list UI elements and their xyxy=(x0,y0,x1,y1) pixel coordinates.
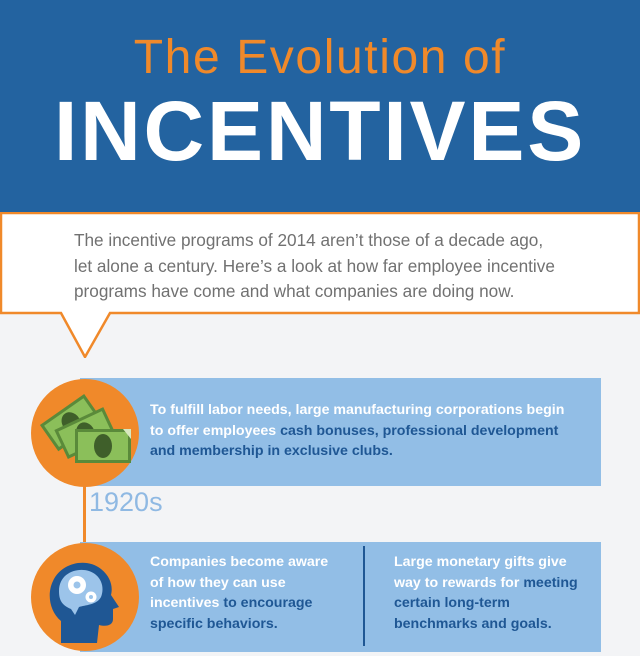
panel: labor needs xyxy=(80,378,601,486)
text: labor needs: To fulfill labor needs, large manufacturing corporations begin xyxy=(150,402,564,418)
text: labor needs: to offer employees cash bonuses, professional development xyxy=(150,422,558,438)
text: labor needs xyxy=(150,402,564,459)
text: right column: way to rewards for meeting xyxy=(394,574,578,590)
intro text: let alone a century. Here’s a look at how far employee incentive xyxy=(74,256,555,276)
title line 2: INCENTIVES xyxy=(54,84,586,178)
panel: 1920s xyxy=(80,542,601,652)
intro text: The incentive programs of 2014 aren’t those of a decade ago, xyxy=(74,230,543,250)
intro text: programs have come and what companies are doing now. xyxy=(74,281,514,301)
text: right column: certain long-term xyxy=(394,595,510,611)
year label: 1920s: 1920s xyxy=(89,487,163,517)
text: left column: incentives to encourage xyxy=(150,595,312,611)
timeline line xyxy=(83,480,86,550)
text: right column: benchmarks and goals. xyxy=(394,616,552,632)
icon: money circle xyxy=(31,379,139,487)
intro callout box xyxy=(0,212,640,358)
title line 1: The Evolution of xyxy=(134,31,506,84)
header banner xyxy=(0,0,640,212)
text: left column: of how they can use xyxy=(150,574,286,590)
text: right column: Large monetary gifts give xyxy=(394,554,567,570)
text: left column: Companies become aware xyxy=(150,554,328,570)
icon: head with gears xyxy=(31,543,139,651)
text: labor needs: and membership in exclusive clubs. xyxy=(150,443,393,459)
intro text xyxy=(74,230,555,301)
divider xyxy=(363,546,365,646)
text: left column: specific behaviors. xyxy=(150,616,278,632)
text: left column xyxy=(150,554,328,632)
text: right column xyxy=(394,554,578,632)
